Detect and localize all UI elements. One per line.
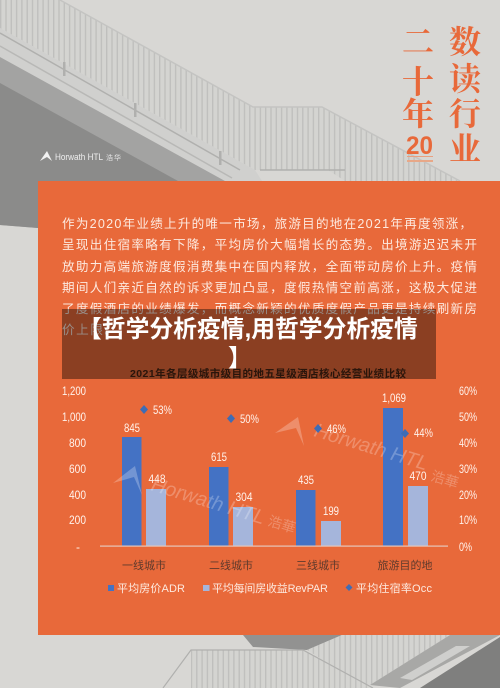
bar value labels: 1,069 [382,391,406,405]
right axis labels: 20% [459,488,477,502]
chart title: 2021年各层级城市级目的地五星级酒店核心经营业绩比较 [130,367,406,380]
vertical title: 数读行业: 数 [449,24,481,60]
baseline [100,546,448,547]
body paragraph: 放助力高端旅游度假消费集中在国内释放，全面带动房价上升。疫情 [62,259,477,274]
vertical title: 数读行业: 读 [449,61,482,97]
bar value labels: 304 [236,490,253,504]
vertical title: 二十年: 年 [402,96,434,132]
staircase photo: bottom [163,635,500,688]
occupancy diamonds [140,405,409,438]
occupancy labels: 50% [240,412,259,426]
left axis labels: 400 [69,488,86,502]
vertical title: 数读行业: 业 [449,131,481,167]
overlay headline: 】 [228,345,252,372]
bar value labels: 470 [410,469,427,483]
body paragraph: 呈现出住宿率略有下降，平均房价大幅增长的态势。出境游迟迟未开 [62,237,477,252]
vertical title: 数读行业 [449,24,482,167]
occupancy labels: 44% [414,426,433,440]
ADR bars [122,408,403,546]
20th anniversary badge: 20 [406,132,433,160]
occupancy labels: 46% [327,422,346,436]
left axis labels: 1,200 [62,384,86,398]
RevPAR bars [146,486,428,546]
left axis labels: 200 [69,513,86,527]
bar value labels: 435 [298,473,314,487]
category labels [122,558,432,572]
staircase photo: top [0,0,460,228]
left axis labels [62,384,86,554]
body paragraph: 作为2020年业绩上升的唯一市场，旅游目的地在2021年再度领涨， [62,216,472,231]
left axis labels: 600 [69,462,86,476]
right axis labels [459,384,477,554]
dark title overlay [62,309,436,379]
body paragraph: 期间人们亲近自然的诉求更加凸显，度假热情空前高涨，这极大促进 [62,280,477,295]
body paragraph: 价上限。 [62,323,117,337]
vertical title: 数读行业: 行 [449,96,481,132]
overlay headline: 【哲学分析疫情,用哲学分析疫情 [78,316,418,343]
left axis labels: 1,000 [62,410,86,424]
vertical title: 二十年: 二 [402,24,434,60]
bar chart [62,384,477,572]
category labels: 三线城市 [296,558,340,572]
bar value labels: 199 [323,504,339,518]
right axis labels: 50% [459,410,477,424]
legend: 平均房价ADR [117,582,185,595]
category labels: 二线城市 [209,558,253,572]
bar value labels [124,391,427,518]
vertical title: 二十年 [402,24,434,132]
bar value labels: 448 [148,472,166,486]
category labels: 一线城市 [122,558,166,572]
brand logo: Horwath HTL: 浩华 [106,153,121,162]
bar value labels: 615 [211,450,227,464]
left axis labels: - [76,540,80,554]
body paragraph [62,216,477,337]
legend [108,581,432,595]
right axis labels: 40% [459,436,477,450]
body paragraph: 了度假酒店的业绩爆发，而概念新颖的优质度假产品更是持续刷新房 [62,301,477,316]
brand logo: Horwath HTL: Horwath HTL [55,152,103,163]
watermark: Horwath HTL [312,420,431,475]
vertical title: 二十年: 十 [402,64,434,100]
right axis labels: 30% [459,462,477,476]
occupancy labels [153,403,433,440]
occupancy labels: 53% [153,403,172,417]
left axis labels: 800 [69,436,86,450]
right axis labels: 10% [459,513,477,527]
overlay headline [78,316,418,372]
brand logo: Horwath HTL [40,151,121,163]
legend: 平均每间房收益RevPAR [212,581,328,595]
bar value labels: 845 [124,421,140,435]
watermark: Horwath HTL [149,474,268,529]
watermark: 浩華 [429,468,461,491]
orange content panel [38,181,500,635]
watermark [113,417,461,536]
watermark: 浩華 [266,513,298,536]
right axis labels: 60% [459,384,477,398]
category labels: 旅游目的地 [378,558,432,572]
legend: 平均住宿率Occ [356,581,432,595]
right axis labels: 0% [459,540,472,554]
